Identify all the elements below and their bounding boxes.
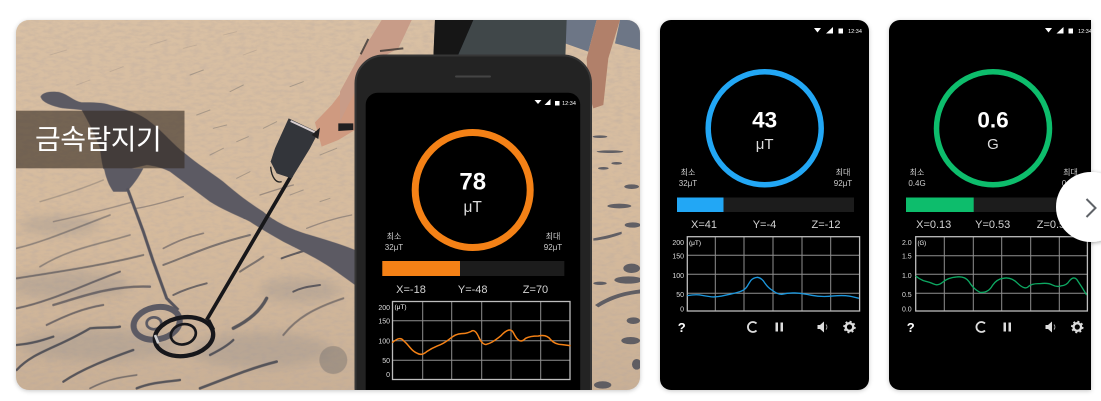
minimum label: 최소 — [387, 231, 401, 241]
icon: speaker — [1046, 322, 1055, 332]
line chart — [902, 237, 1088, 314]
axis readings — [691, 220, 840, 228]
maximum label: 92μT — [834, 179, 852, 188]
phone speaker — [455, 76, 491, 78]
line chart: 0.0 — [902, 306, 912, 314]
icon: help: ? — [907, 320, 915, 335]
gauge value: 0.6 — [977, 108, 1009, 133]
panel: beach photo card — [10, 20, 642, 401]
axis readings: Z=0.55 — [1037, 219, 1071, 231]
line chart: 150 — [378, 318, 390, 326]
level bar — [677, 198, 854, 212]
next arrow button — [1056, 172, 1101, 242]
line chart: 200 — [378, 305, 390, 312]
minimum label: 32μT — [679, 179, 697, 188]
icon: speaker — [818, 322, 827, 332]
maximum label: 0.9G — [1062, 179, 1079, 188]
level bar — [382, 261, 564, 276]
line chart: 100 — [672, 273, 684, 280]
maximum label — [1062, 167, 1079, 188]
detector coil — [152, 313, 216, 360]
person behind the phone — [340, 20, 640, 108]
icon: pause — [776, 322, 783, 332]
line chart: 200 — [672, 240, 684, 247]
line chart: 2.0 — [902, 240, 912, 247]
status bar — [814, 27, 862, 34]
hand on the handle — [315, 75, 355, 147]
line chart: (μT) — [394, 304, 407, 311]
maximum label: 92μT — [544, 243, 562, 252]
icon: reset — [976, 322, 985, 332]
line chart: 50 — [382, 358, 390, 365]
sand ripple shadows — [17, 32, 352, 388]
axis readings: X=41 — [691, 219, 717, 231]
line chart — [672, 237, 860, 314]
status bar: 12:34 — [848, 29, 862, 35]
sand background — [16, 20, 640, 390]
minimum label: 0.4G — [908, 179, 926, 188]
gauge ring — [936, 72, 1050, 185]
gauge ring — [708, 72, 821, 185]
line chart — [378, 302, 570, 380]
maximum label: 최대 — [836, 167, 850, 177]
line chart: 0 — [386, 372, 390, 379]
phone frame — [356, 56, 591, 401]
gauge unit: G — [987, 136, 999, 153]
icon: pause — [1004, 322, 1011, 332]
maximum label — [544, 231, 562, 252]
minimum label — [679, 167, 697, 188]
line chart: 0 — [680, 306, 684, 314]
icon: help: ? — [678, 320, 686, 335]
status bar: 12:34 — [562, 101, 576, 107]
title banner — [16, 111, 184, 168]
gauge unit: μT — [463, 199, 482, 216]
gauge value: 78 — [459, 168, 486, 196]
minimum label: 32μT — [385, 243, 403, 252]
line chart: 0.5 — [902, 292, 912, 299]
line chart: 1.5 — [902, 254, 912, 260]
minimum label — [908, 167, 926, 188]
maximum label — [834, 167, 852, 188]
axis readings: Y=-4 — [753, 219, 776, 231]
line chart: (μT) — [689, 240, 701, 247]
minimum label: 최소 — [910, 167, 924, 177]
line chart: 150 — [672, 254, 684, 260]
icon: chevron right — [1086, 199, 1096, 217]
axis readings: X=0.13 — [916, 219, 951, 231]
line chart: (G) — [918, 241, 926, 247]
axis readings: Z=70 — [523, 284, 548, 296]
icon: reset — [748, 322, 756, 332]
axis readings — [916, 219, 1071, 231]
minimum label — [385, 231, 403, 252]
detector shaft — [207, 175, 292, 320]
axis readings — [396, 286, 548, 293]
axis readings: Y=-48 — [458, 284, 488, 296]
metal detector — [152, 75, 355, 360]
gauge ring — [415, 132, 530, 248]
axis readings: Y=0.53 — [975, 219, 1010, 231]
title banner: 금속탐지기 — [35, 124, 161, 155]
detector control box — [271, 118, 318, 178]
maximum label: 최대 — [1063, 167, 1078, 177]
right edge sand ripples — [593, 135, 642, 389]
status bar: 12:34 — [1078, 29, 1092, 35]
axis readings: Z=-12 — [811, 219, 841, 231]
icon: settings gear — [844, 322, 855, 332]
panel: green gauss screenshot — [889, 20, 1092, 390]
status bar — [534, 99, 576, 106]
axis readings: X=-18 — [396, 284, 426, 296]
phone mockup — [356, 56, 591, 401]
line chart: 100 — [378, 338, 390, 346]
maximum label: 최대 — [546, 231, 560, 241]
gauge value: 43 — [752, 108, 777, 133]
minimum label: 최소 — [681, 167, 695, 177]
person shadow with detector shadow — [41, 92, 355, 344]
phone screen — [366, 93, 580, 401]
level bar — [906, 198, 1083, 212]
panel: blue microtesla screenshot — [660, 20, 869, 390]
status bar — [1045, 27, 1092, 35]
gauge unit: μT — [756, 136, 774, 153]
line chart: 50 — [676, 292, 684, 299]
line chart: 1.0 — [902, 273, 912, 280]
diffuse shading in the lower sand — [10, 215, 340, 368]
icon: settings gear — [1072, 322, 1083, 332]
